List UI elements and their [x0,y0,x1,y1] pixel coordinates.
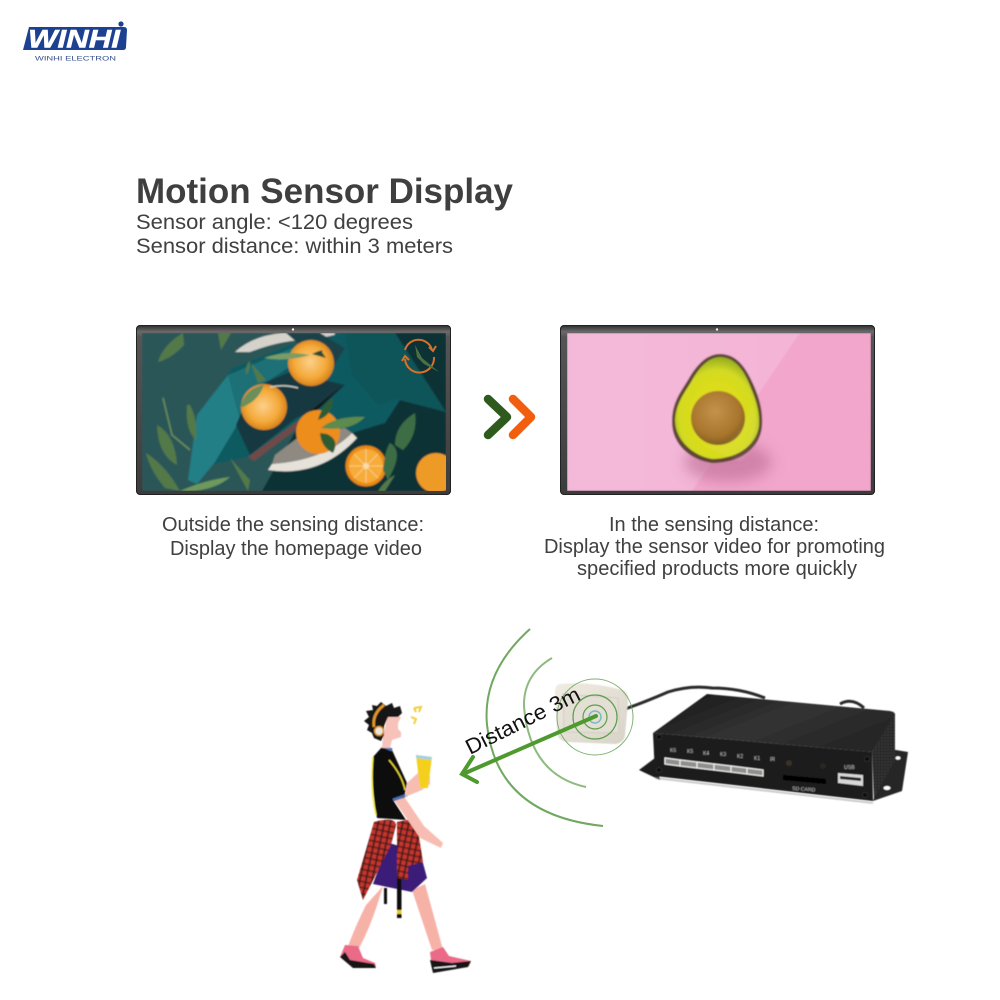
logo: WINHI: WINHI ELECTRON [35,56,116,62]
caption: in sensing distance: Display the sensor video for promoting [544,536,885,558]
port row: K2 [737,754,743,760]
port row: K1 [754,756,760,762]
arrow: detection distance [462,716,596,782]
lower arm [394,795,443,848]
legs [348,884,443,950]
signal waves [487,629,633,826]
title: Motion Sensor Display [136,172,514,211]
plaid shirt tied at waist [357,818,423,900]
arrow: double chevron [488,399,531,435]
caption: in sensing distance [544,514,885,580]
sensor module [555,683,628,744]
torso: black tee [372,747,407,820]
port row [665,748,775,776]
port row: K5 [687,749,693,755]
port row: K6 [670,748,676,754]
headphone cup [374,726,384,736]
screen image: oranges on teal cloth [142,333,456,493]
screen image: avocado on pink [567,333,871,491]
device: media player box [625,687,908,803]
logo: WINHI [23,21,127,62]
text: sensor specifications: Sensor angle: <120 degrees [136,210,413,234]
caption: outside sensing distance [162,514,424,560]
USB port: USB [844,765,855,771]
shoes [340,945,471,973]
port row: IR [770,757,775,763]
raised arm [405,772,430,797]
cup [416,755,432,788]
straps [384,878,402,918]
port row: K3 [720,752,726,758]
illustration: walking person [340,702,471,973]
text: sensor specifications [136,210,453,258]
USB port [838,765,863,786]
headphones [374,705,384,727]
neck and face [382,713,401,748]
text: sensor specifications: Sensor distance: within 3 meters [136,234,453,258]
label: distance 3m: Distance 3m [462,682,584,759]
SD card slot [783,775,826,794]
hair [364,702,402,741]
shorts [373,843,427,892]
SD card slot: SD CARD [792,786,816,794]
caption: in sensing distance: In the sensing distance: [609,514,819,536]
caption: outside sensing distance: Outside the sensing distance: [162,514,424,536]
icon: rotating loop arrows [402,340,439,373]
panel: homepage video screen [136,325,456,495]
caption: outside sensing distance: Display the homepage video [170,538,422,560]
port row: K4 [703,751,709,757]
music notes [411,707,421,724]
caption: in sensing distance: specified products more quickly [577,558,857,580]
panel: sensor video screen [560,325,875,495]
logo: WINHI: WINHI [28,26,121,54]
